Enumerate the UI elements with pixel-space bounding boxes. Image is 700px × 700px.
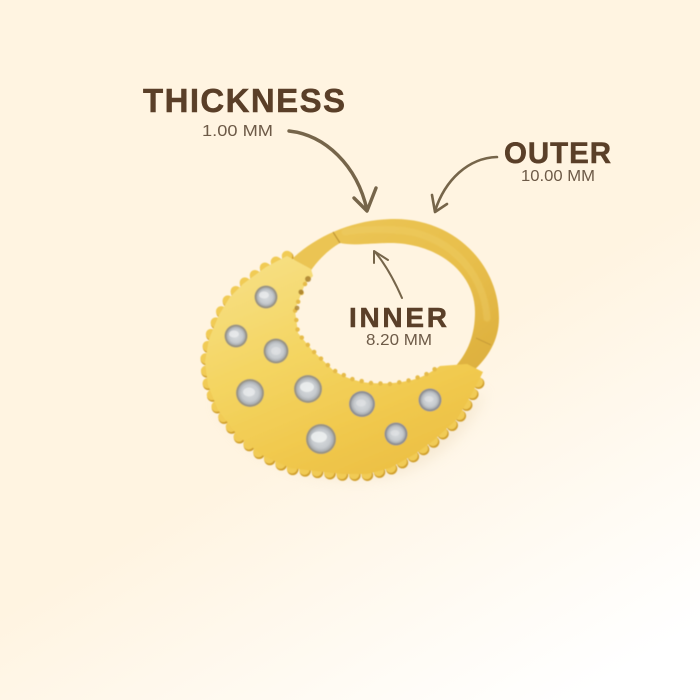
gem 6 (349, 391, 375, 417)
gold ring earring (205, 219, 499, 475)
crescent body (205, 256, 483, 474)
gem 5 (294, 375, 322, 403)
gem 7 (418, 388, 442, 412)
thickness value: 1.00 MM (202, 123, 273, 140)
arrow: thickness (289, 131, 376, 211)
outer value: 10.00 MM (521, 168, 595, 185)
shadow under jewellery (215, 390, 485, 479)
inner beaded edge (295, 284, 440, 384)
gem 4 (236, 379, 264, 407)
gem 8 (384, 422, 408, 446)
outer label: OUTER (504, 137, 611, 170)
inner label: INNER (349, 302, 447, 333)
gem 3 (264, 338, 288, 364)
hinge seam right (476, 338, 491, 345)
inner value: 8.20 MM (366, 332, 432, 349)
gem 9 (306, 424, 336, 454)
gem 2 (224, 324, 248, 348)
scallop teeth (205, 256, 481, 474)
horn dark beads (295, 276, 311, 310)
thickness label: THICKNESS (143, 82, 345, 119)
gem 1 (254, 286, 278, 308)
arrow: outer (432, 157, 497, 212)
ring highlight (345, 229, 487, 318)
arrow: inner (374, 251, 402, 298)
scallop shadow (206, 257, 482, 475)
ring band (293, 219, 499, 372)
gemstones (224, 286, 442, 454)
hinge seam top (333, 232, 340, 243)
